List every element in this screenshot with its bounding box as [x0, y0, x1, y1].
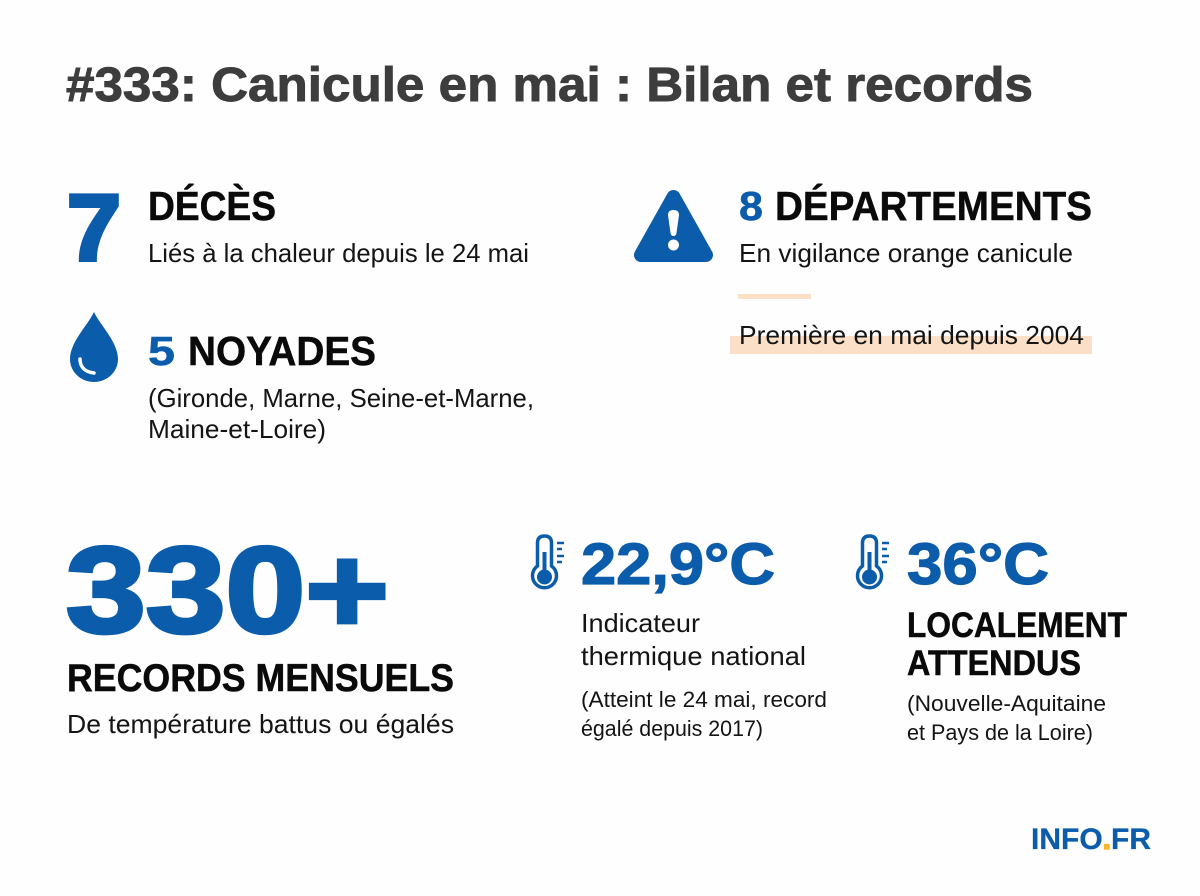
- text: deaths detail: Liés à la chaleur depuis le 24 mai: [148, 238, 529, 268]
- text: records detail: De température battus ou égalés: [67, 709, 454, 739]
- heading: locally expected: ATTENDUS: [907, 644, 1081, 683]
- panel: departments: [641, 183, 1092, 354]
- heading: drownings number: 5: [148, 328, 175, 374]
- text: indicator detail: égalé depuis 2017): [581, 716, 763, 741]
- number: 7: 7: [67, 175, 121, 280]
- text: vigilance: En vigilance orange canicule: [739, 238, 1073, 268]
- panel: national indicator: [532, 532, 827, 741]
- number: 22,9°C: 22,9°C: [581, 532, 775, 597]
- icon: warning triangle: [641, 197, 706, 255]
- icon: thermometer: [858, 536, 889, 588]
- text: drownings detail: Maine-et-Loire): [148, 414, 326, 444]
- text: indicator: Indicateur: [581, 608, 700, 638]
- heading: departments number: 8: [739, 183, 763, 229]
- panel: deaths: [67, 175, 529, 280]
- heading: deaths: DÉCÈS: [148, 183, 276, 229]
- text: drownings detail: [148, 383, 534, 444]
- text: indicator detail: (Atteint le 24 mai, record: [581, 687, 827, 712]
- panel: records: [66, 522, 454, 739]
- heading: departments label: DÉPARTEMENTS: [775, 183, 1092, 229]
- icon: water drop: [70, 312, 118, 382]
- text: indicator: thermique national: [581, 641, 806, 671]
- icon: thermometer: [532, 536, 564, 588]
- logo: INFO.FR: INFO.FR: [1031, 823, 1151, 856]
- text: regions: (Nouvelle-Aquitaine: [907, 691, 1106, 716]
- text: drownings detail: (Gironde, Marne, Seine-et-Marne,: [148, 383, 534, 413]
- panel: drownings: [70, 312, 534, 444]
- number: 36°C: 36°C: [907, 532, 1049, 597]
- accent line: [738, 294, 811, 299]
- heading: locally expected: LOCALEMENT: [907, 606, 1127, 645]
- heading: locally expected: [907, 606, 1127, 683]
- text: regions: [907, 691, 1106, 745]
- panel: local temperature: [858, 532, 1127, 745]
- title: #333: Canicule en mai : Bilan et records: [66, 59, 1033, 112]
- heading: drownings label: NOYADES: [188, 328, 376, 374]
- text: indicator detail: [581, 687, 827, 741]
- text: indicator: [581, 608, 806, 671]
- heading: records: RECORDS MENSUELS: [67, 657, 454, 700]
- number: 330+: 330+: [66, 522, 389, 658]
- text: regions: et Pays de la Loire): [907, 720, 1093, 745]
- callout: first since 2004: Première en mai depuis 2004: [739, 320, 1084, 350]
